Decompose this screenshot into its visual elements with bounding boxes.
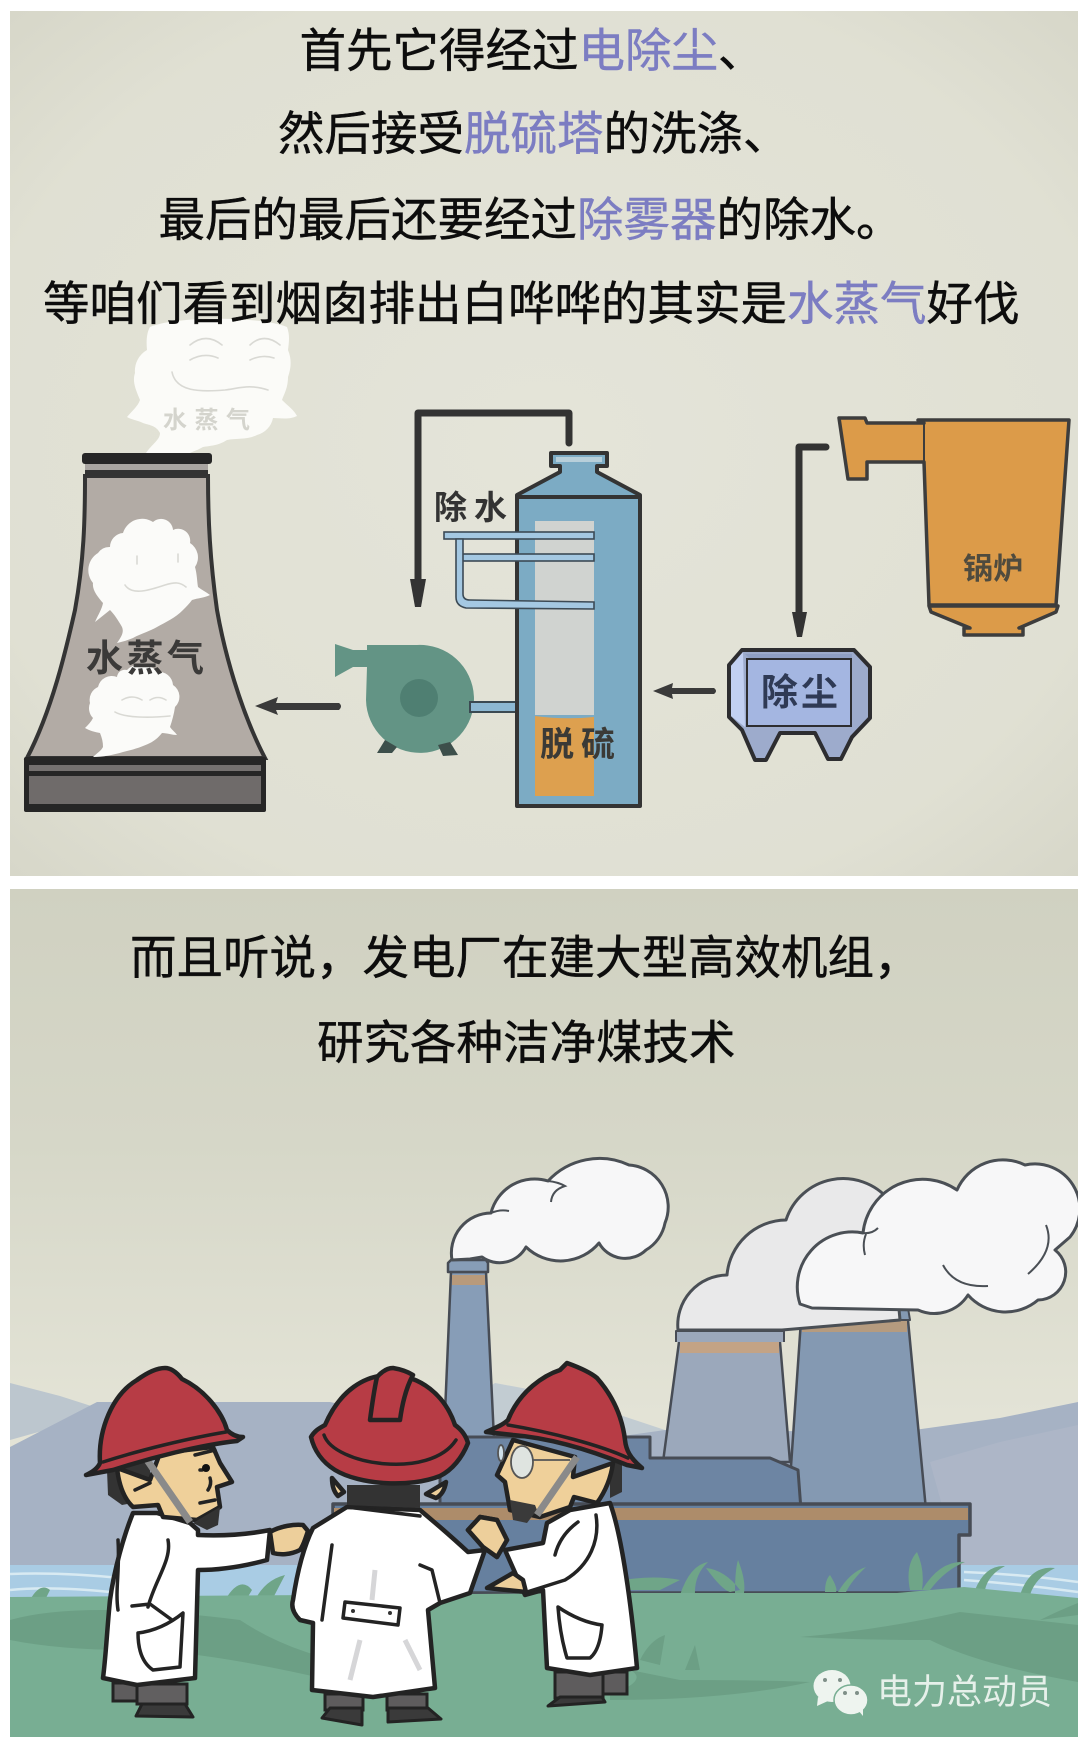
beard <box>193 1507 220 1530</box>
distant hills <box>10 1383 1078 1565</box>
worker: right, with glasses <box>468 1363 642 1706</box>
fan <box>335 644 474 756</box>
pipe: fan to absorber <box>470 702 517 712</box>
scrubber interior <box>535 521 594 715</box>
hair <box>107 1460 150 1505</box>
head <box>497 1440 613 1517</box>
smoke from rear cooling tower <box>678 1179 900 1330</box>
boiler house <box>440 1437 801 1510</box>
power plant <box>333 1260 970 1593</box>
tower shell <box>517 453 640 806</box>
tower cap <box>82 453 212 464</box>
label: water vapour: 水蒸气 <box>86 638 204 679</box>
watermark <box>814 1670 1052 1716</box>
account name: 电力总动员 <box>877 1673 1052 1712</box>
tower body <box>27 476 265 758</box>
absorber tower <box>434 453 640 806</box>
helmet brim line <box>103 1432 226 1462</box>
coat folds and pocket <box>117 1540 183 1670</box>
meadow <box>10 1587 1078 1737</box>
cooling tower <box>24 453 266 812</box>
strap <box>537 1457 577 1515</box>
heading: process explanation: 等咱们看到烟囱排出白哗哗的其实是水蒸气好伐 <box>43 278 1020 330</box>
platform <box>333 1504 970 1593</box>
coat <box>505 1503 637 1675</box>
dust collector <box>729 650 870 760</box>
arrow: fan to tower <box>255 697 341 715</box>
helmet brim line <box>324 1435 456 1464</box>
lower hand <box>487 1573 526 1592</box>
ears <box>332 1478 446 1498</box>
arrow: dust collector to absorber <box>653 683 716 699</box>
legs <box>548 1672 627 1706</box>
heading: process explanation: 然后接受脱硫塔的洗涤、 <box>278 108 790 160</box>
upper hand of centre worker overlap <box>468 1517 507 1557</box>
tower ring <box>85 470 208 476</box>
coat <box>292 1507 485 1697</box>
legs <box>113 1683 193 1717</box>
tower cap highlight <box>556 457 602 462</box>
cooling tower, front <box>788 1308 926 1510</box>
steam cloud above the stack: 水蒸气 <box>163 407 250 434</box>
hand <box>270 1525 308 1554</box>
steam cloud in tower, upper <box>88 519 210 643</box>
hand <box>468 1517 507 1557</box>
worker: centre, seen from behind <box>292 1368 507 1725</box>
river <box>10 1565 1078 1601</box>
head <box>117 1447 232 1520</box>
steam cloud in tower, lower <box>85 664 179 757</box>
icon: wechat bubbles <box>814 1670 868 1716</box>
label: boiler: 锅炉 <box>963 553 1023 586</box>
arrow: absorber outlet back to fan <box>410 413 569 607</box>
grass behind figures <box>30 1552 1055 1600</box>
beard <box>510 1500 537 1523</box>
heading: plant upgrades <box>130 932 920 1069</box>
helmet <box>486 1363 642 1468</box>
glasses <box>498 1445 570 1478</box>
helmet ridge <box>370 1368 413 1420</box>
demister pipes <box>444 532 594 609</box>
strap <box>147 1460 190 1522</box>
smoke from front cooling tower <box>797 1160 1080 1313</box>
coat folds and pocket <box>527 1515 602 1658</box>
tower shoulder line <box>518 495 639 499</box>
back pocket <box>343 1602 400 1625</box>
panel: power plant scene <box>10 889 1080 1737</box>
tower base <box>24 757 266 812</box>
label: dust removal: 除尘 <box>761 672 838 713</box>
helmet <box>311 1375 468 1483</box>
label: demisting: 除水 <box>434 489 507 526</box>
heading: process explanation: 最后的最后还要经过除雾器的除水。 <box>158 194 902 246</box>
helmet brim line <box>508 1425 628 1458</box>
slurry <box>535 716 594 796</box>
arrow: boiler to dust collector <box>792 447 826 637</box>
face details <box>135 1450 215 1503</box>
chimney <box>444 1258 495 1436</box>
steam cloud above the stack <box>127 319 297 453</box>
coat folds <box>322 1507 440 1620</box>
worker: left, pointing <box>86 1368 308 1717</box>
neck <box>347 1485 420 1508</box>
label: desulfurization: 脱硫 <box>540 726 615 764</box>
boiler <box>839 418 1069 635</box>
heading: process explanation <box>43 25 1020 330</box>
cooling tower, rear <box>663 1331 790 1462</box>
helmet <box>86 1368 243 1475</box>
legs <box>322 1694 441 1725</box>
hair <box>610 1462 622 1498</box>
heading: plant upgrades: 而且听说，发电厂在建大型高效机组， <box>130 932 920 984</box>
coat <box>103 1513 270 1685</box>
heading: plant upgrades: 研究各种洁净煤技术 <box>317 1017 736 1069</box>
heading: process explanation: 首先它得经过电除尘、 <box>300 25 764 77</box>
smoke from chimney <box>451 1158 668 1263</box>
tower neck band <box>85 464 208 472</box>
panel: flue gas treatment process <box>10 11 1078 876</box>
